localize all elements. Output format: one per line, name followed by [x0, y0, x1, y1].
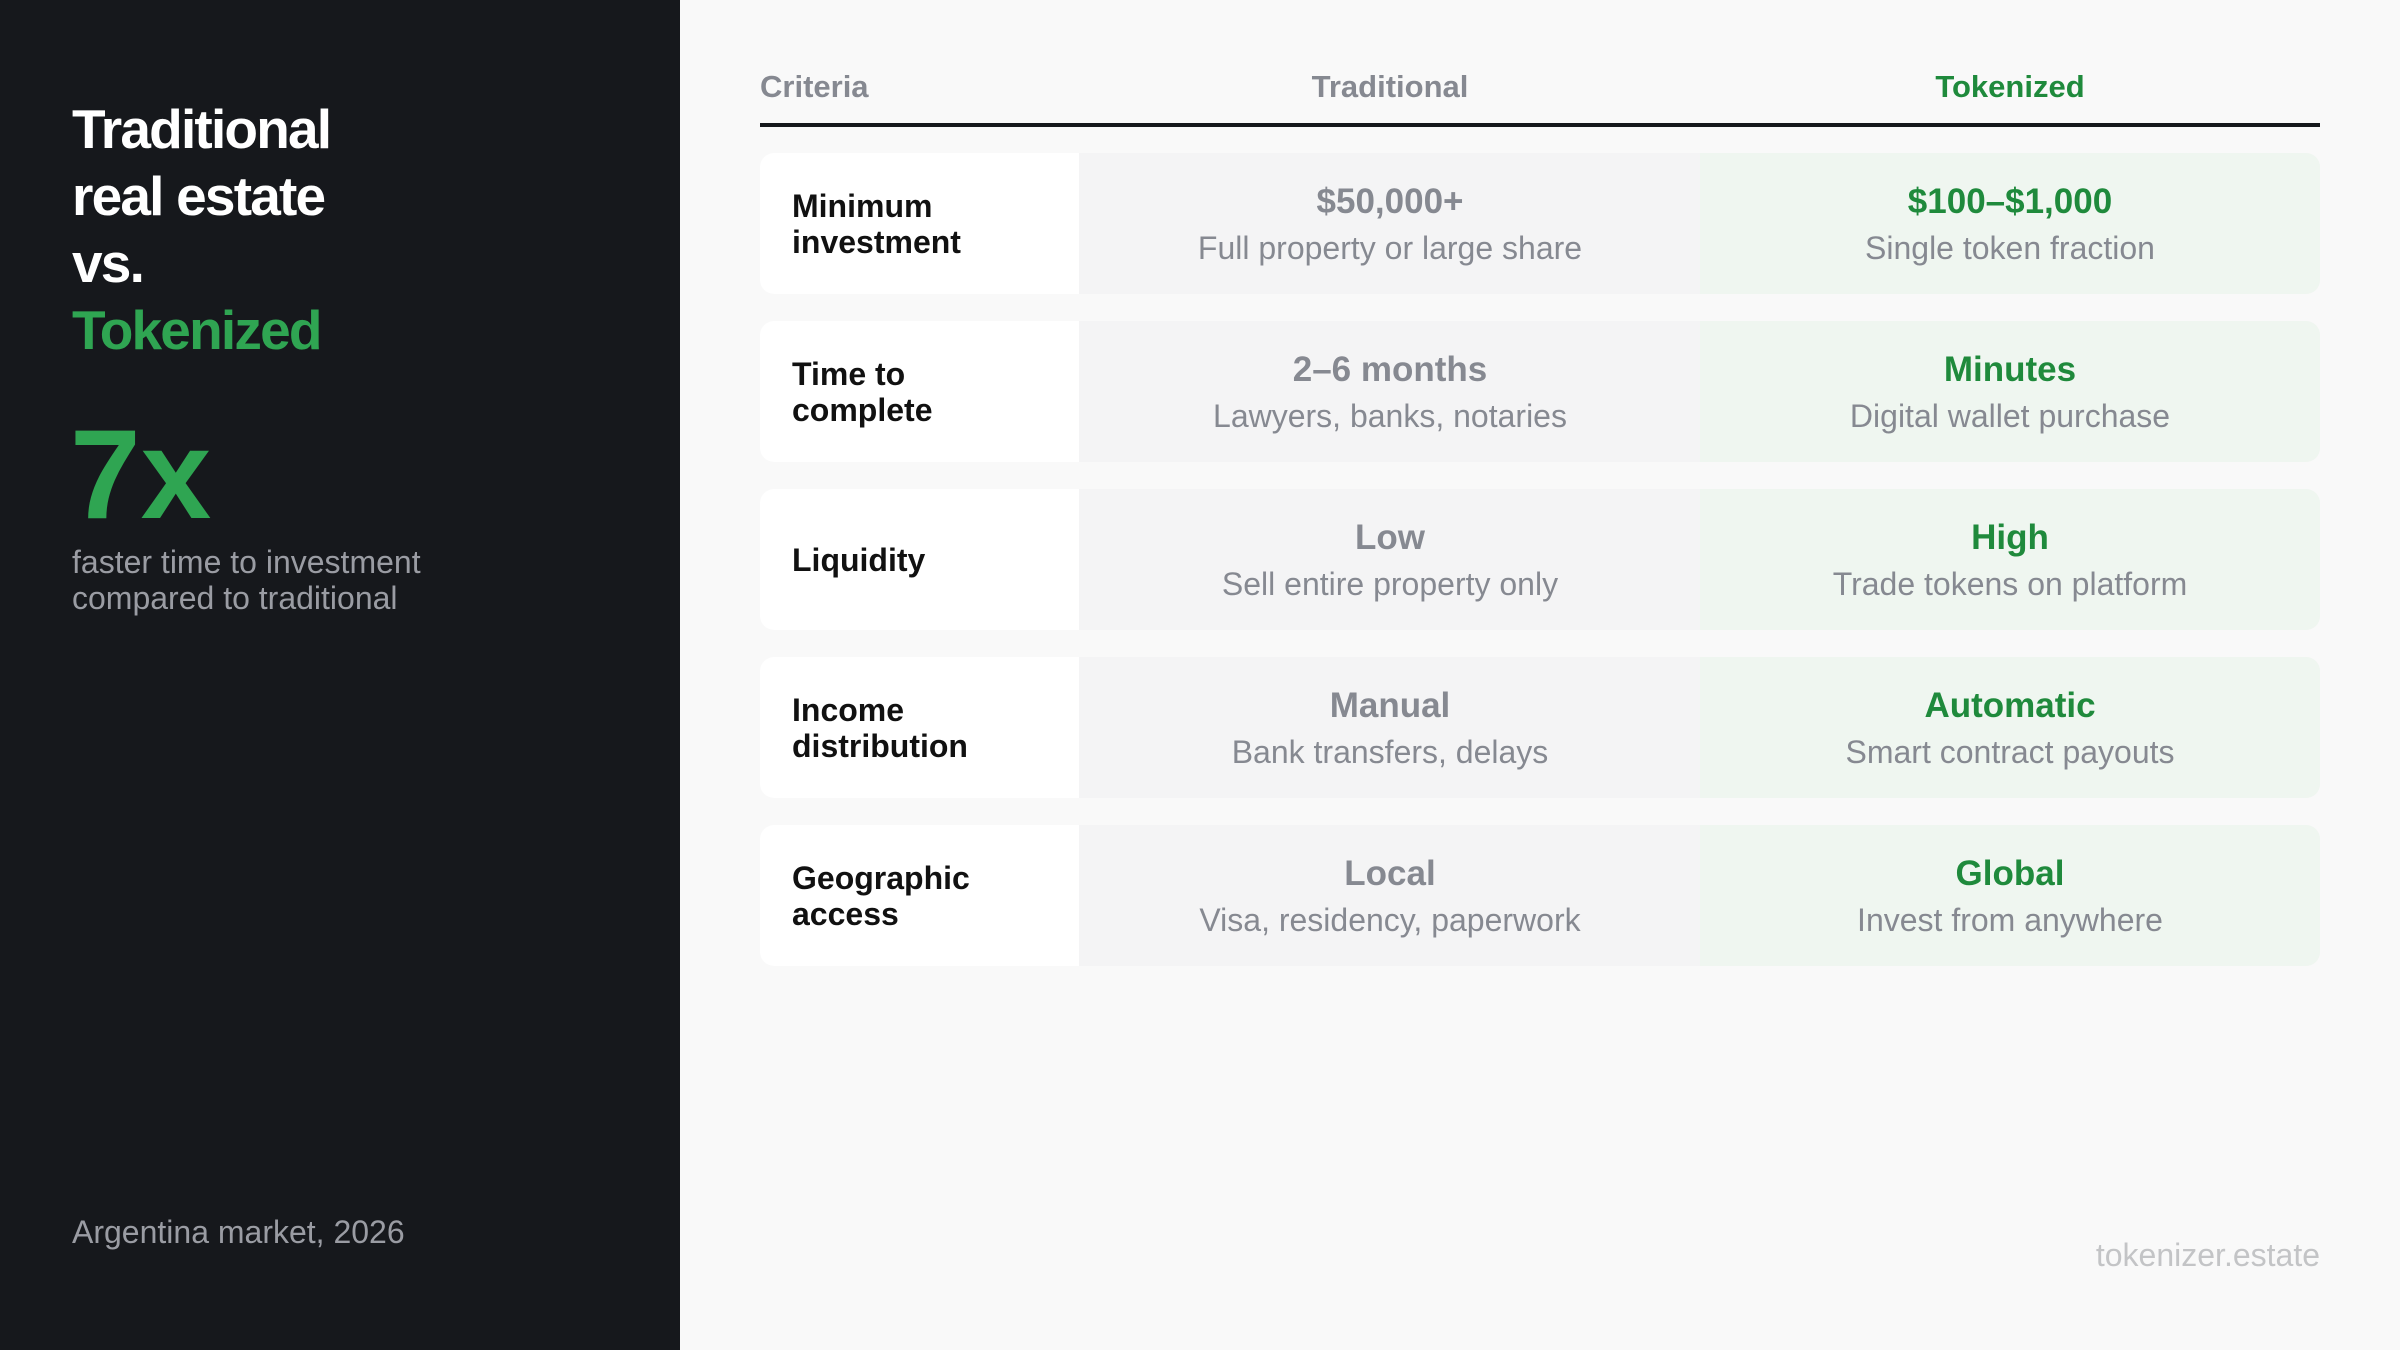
row: minimum investment: Full property or large share: [1198, 230, 1582, 266]
row: liquidity: Trade tokens on platform: [1833, 566, 2187, 602]
row: geographic access: Global: [1956, 854, 2064, 893]
row: income distribution: Automatic: [1924, 686, 2096, 725]
row: time to complete: complete: [792, 392, 932, 428]
row: time to complete: Lawyers, banks, notaries: [1213, 398, 1567, 434]
title: Traditional: [72, 98, 330, 160]
row: geographic access: [760, 825, 2320, 966]
stat caption: faster time to investment: [72, 544, 421, 580]
title: real estate: [72, 165, 324, 227]
title: vs.: [72, 232, 143, 294]
row: income distribution: Smart contract payouts: [1845, 734, 2175, 770]
row: income distribution: distribution: [792, 728, 968, 764]
row: liquidity: High: [1971, 518, 2049, 557]
header: tokenized: Tokenized: [1935, 69, 2085, 104]
row: minimum investment: investment: [792, 224, 961, 260]
footer note: Argentina market, 2026: [72, 1214, 405, 1250]
title: Tokenized: [72, 299, 321, 361]
left panel: [0, 0, 680, 1350]
row: time to complete: Digital wallet purchase: [1850, 398, 2170, 434]
big stat: 7x: [70, 403, 211, 545]
title: [72, 98, 330, 361]
row: time to complete: Time to: [792, 356, 905, 392]
row: liquidity: [760, 489, 2320, 630]
row: income distribution: Manual: [1330, 686, 1450, 725]
row: minimum investment: Minimum: [792, 188, 932, 224]
row: geographic access: access: [792, 896, 899, 932]
row: income distribution: Bank transfers, delays: [1232, 734, 1548, 770]
row: time to complete: 2–6 months: [1293, 350, 1487, 389]
stat caption: [72, 544, 421, 616]
row: minimum investment: $100–$1,000: [1908, 182, 2112, 221]
row: geographic access: Visa, residency, paperwork: [1199, 902, 1581, 938]
row: minimum investment: [760, 153, 2320, 294]
row: geographic access: Local: [1344, 854, 1436, 893]
row: minimum investment: $50,000+: [1317, 182, 1463, 221]
row: liquidity: Sell entire property only: [1222, 566, 1558, 602]
row: minimum investment: Single token fraction: [1865, 230, 2155, 266]
row: liquidity: Low: [1355, 518, 1425, 557]
row: income distribution: [760, 657, 2320, 798]
row: liquidity: Liquidity: [792, 542, 925, 578]
header: criteria: Criteria: [760, 69, 869, 104]
stat caption: compared to traditional: [72, 580, 398, 616]
row: income distribution: Income: [792, 692, 904, 728]
header: traditional: Traditional: [1312, 69, 1468, 104]
row: geographic access: Invest from anywhere: [1857, 902, 2163, 938]
row: time to complete: [760, 321, 2320, 462]
site credit: tokenizer.estate: [2096, 1237, 2320, 1273]
row: geographic access: Geographic: [792, 860, 970, 896]
row: time to complete: Minutes: [1944, 350, 2076, 389]
